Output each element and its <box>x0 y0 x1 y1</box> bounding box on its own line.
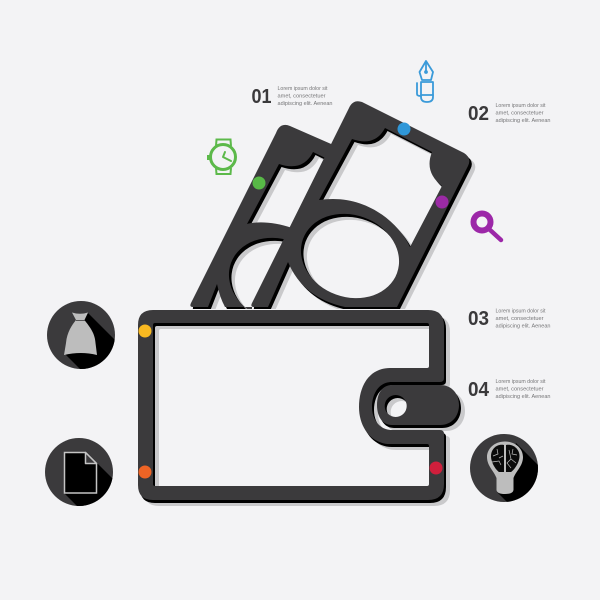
dot: green <box>252 176 266 190</box>
banknote front <box>251 101 475 313</box>
item 02 text: adipiscing elit. Aenean <box>496 118 550 124</box>
item 02 text: 02 <box>468 103 489 125</box>
dot: red <box>430 462 442 474</box>
dot: blue <box>398 122 410 136</box>
icon: brain light bulb in circle <box>470 434 538 502</box>
icon: document in circle <box>45 438 113 506</box>
item 02 text: amet, consectetuer <box>496 110 544 116</box>
dot: orange <box>138 466 152 478</box>
wallet <box>138 310 465 506</box>
item 02 text <box>468 103 550 125</box>
item 03 text: Lorem ipsum dolor sit <box>496 308 546 314</box>
item 03 text: amet, consectetuer <box>496 316 544 322</box>
item 04 text: adipiscing elit. Aenean <box>496 394 550 400</box>
dot: purple <box>436 196 448 208</box>
item 03 text <box>468 308 550 330</box>
item 04 text: amet, consectetuer <box>496 386 544 392</box>
item 01 text: adipiscing elit. Aenean <box>278 101 332 107</box>
dot: yellow <box>138 324 152 338</box>
item 01 text <box>252 86 332 108</box>
item 04 text <box>468 379 550 401</box>
item 01 text: Lorem ipsum dolor sit <box>278 86 328 92</box>
item 03 text: adipiscing elit. Aenean <box>496 324 550 330</box>
icon: money bag in circle <box>47 301 115 369</box>
item 04 text: Lorem ipsum dolor sit <box>496 379 546 385</box>
item 03 text: 03 <box>468 308 489 330</box>
icon: watch <box>207 140 236 174</box>
icon: magnifier <box>474 214 501 240</box>
banknote behind <box>190 124 331 309</box>
item 04 text: 04 <box>468 379 490 401</box>
item 01 text: 01 <box>252 86 272 108</box>
item 01 text: amet, consectetuer <box>278 94 326 100</box>
item 02 text: Lorem ipsum dolor sit <box>496 103 546 109</box>
icon: fountain pen <box>417 61 433 102</box>
